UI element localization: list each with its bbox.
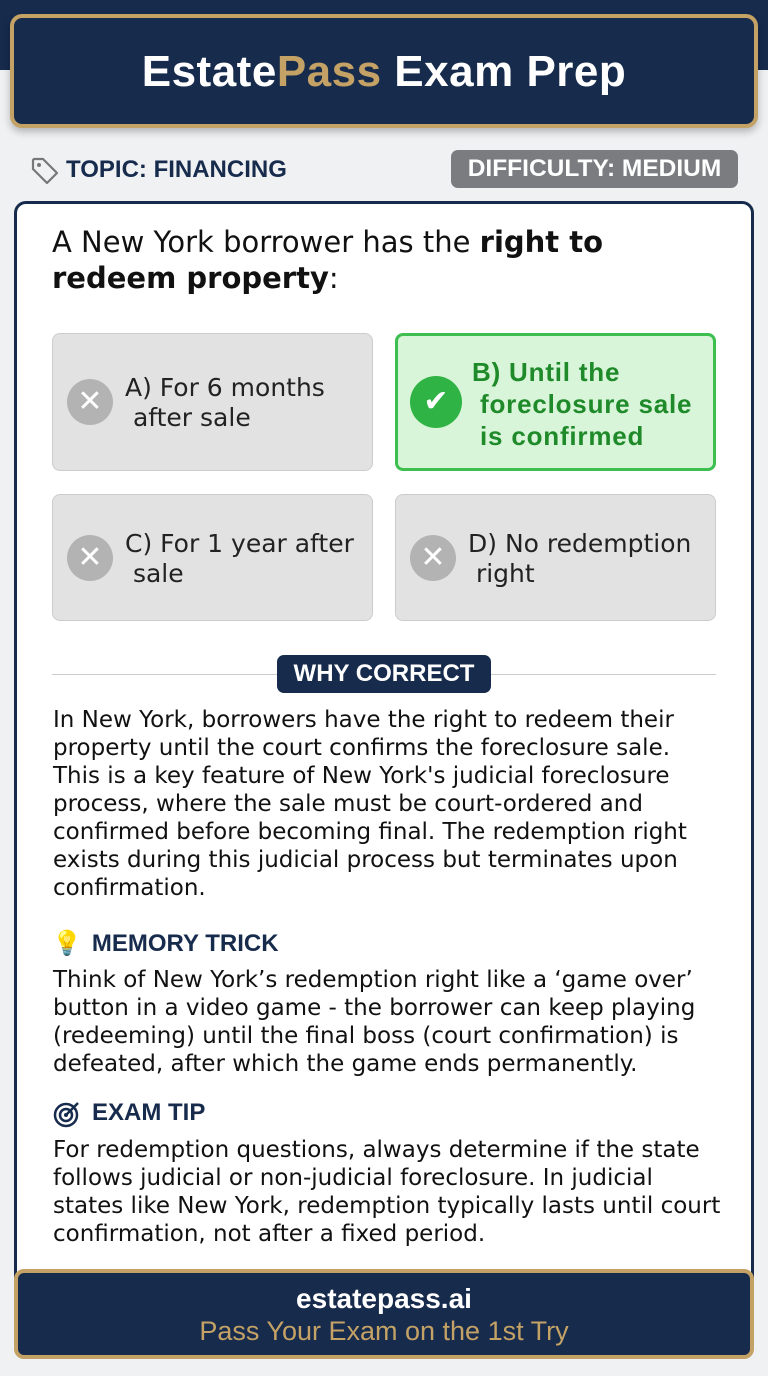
memory trick text: Think of New York’s redemption right like a ‘game over’ [53,967,693,993]
explanation text: property until the court confirms the foreclosure sale. [53,735,670,761]
explanation text: In New York, borrowers have the right to redeem their [53,707,674,733]
explanation text: This is a key feature of New York's judicial foreclosure [53,763,670,789]
option A: A) For 6 months [125,373,325,402]
explanation text: confirmation. [53,875,206,901]
footer: Pass Your Exam on the 1st Try [199,1316,569,1346]
difficulty badge [451,150,738,188]
header: EstatePass Exam Prep [142,47,626,96]
explanation text: exists during this judicial process but terminates upon [53,847,678,873]
memory trick text: (redeeming) until the final boss (court confirmation) is [53,1023,678,1049]
question: redeem property: [52,261,339,295]
exam tip text: For redemption questions, always determine if the state [53,1137,700,1163]
memory trick text [52,967,695,1077]
explanation text [52,707,687,901]
exam tip heading: EXAM TIP [92,1099,205,1126]
explanation text: confirmed before becoming final. The redemption right [53,819,687,845]
exam tip text: confirmation, not after a fixed period. [53,1221,485,1247]
question: A New York borrower has the right to [52,225,603,259]
topic label: TOPIC: FINANCING [66,156,287,183]
option B correct: foreclosure sale [480,389,692,419]
memory trick heading: 💡 MEMORY TRICK [52,930,279,957]
why correct pill [277,655,491,693]
option B correct: is confirmed [480,421,644,451]
exam tip text: follows judicial or non-judicial foreclosure. In judicial [53,1165,653,1191]
option D [395,494,716,621]
option D: D) No redemption [468,529,691,558]
footer [14,1269,754,1359]
why correct pill: WHY CORRECT [294,660,474,687]
explanation text: process, where the sale must be court-ordered and [53,791,643,817]
option C: sale [133,559,184,588]
difficulty badge: DIFFICULTY: MEDIUM [468,155,721,182]
option B correct: ✔ [423,385,449,418]
main card [14,201,754,1301]
footer: estatepass.ai [296,1283,472,1314]
option D: right [476,559,535,588]
option A [52,333,373,471]
exam tip text [53,1137,720,1247]
option B correct [395,333,716,471]
option B correct: B) Until the [472,357,620,387]
option C: C) For 1 year after [125,529,354,558]
header [10,14,758,128]
option C: ✕ [77,540,103,575]
question [52,225,603,295]
option A: after sale [133,403,251,432]
exam tip text: states like New York, redemption typically lasts until court [53,1193,720,1219]
memory trick text: defeated, after which the game ends permanently. [53,1051,637,1077]
option A: ✕ [77,384,103,419]
memory trick text: button in a video game - the borrower can keep playing [53,995,695,1021]
option D: ✕ [420,540,446,575]
option C [52,494,373,621]
